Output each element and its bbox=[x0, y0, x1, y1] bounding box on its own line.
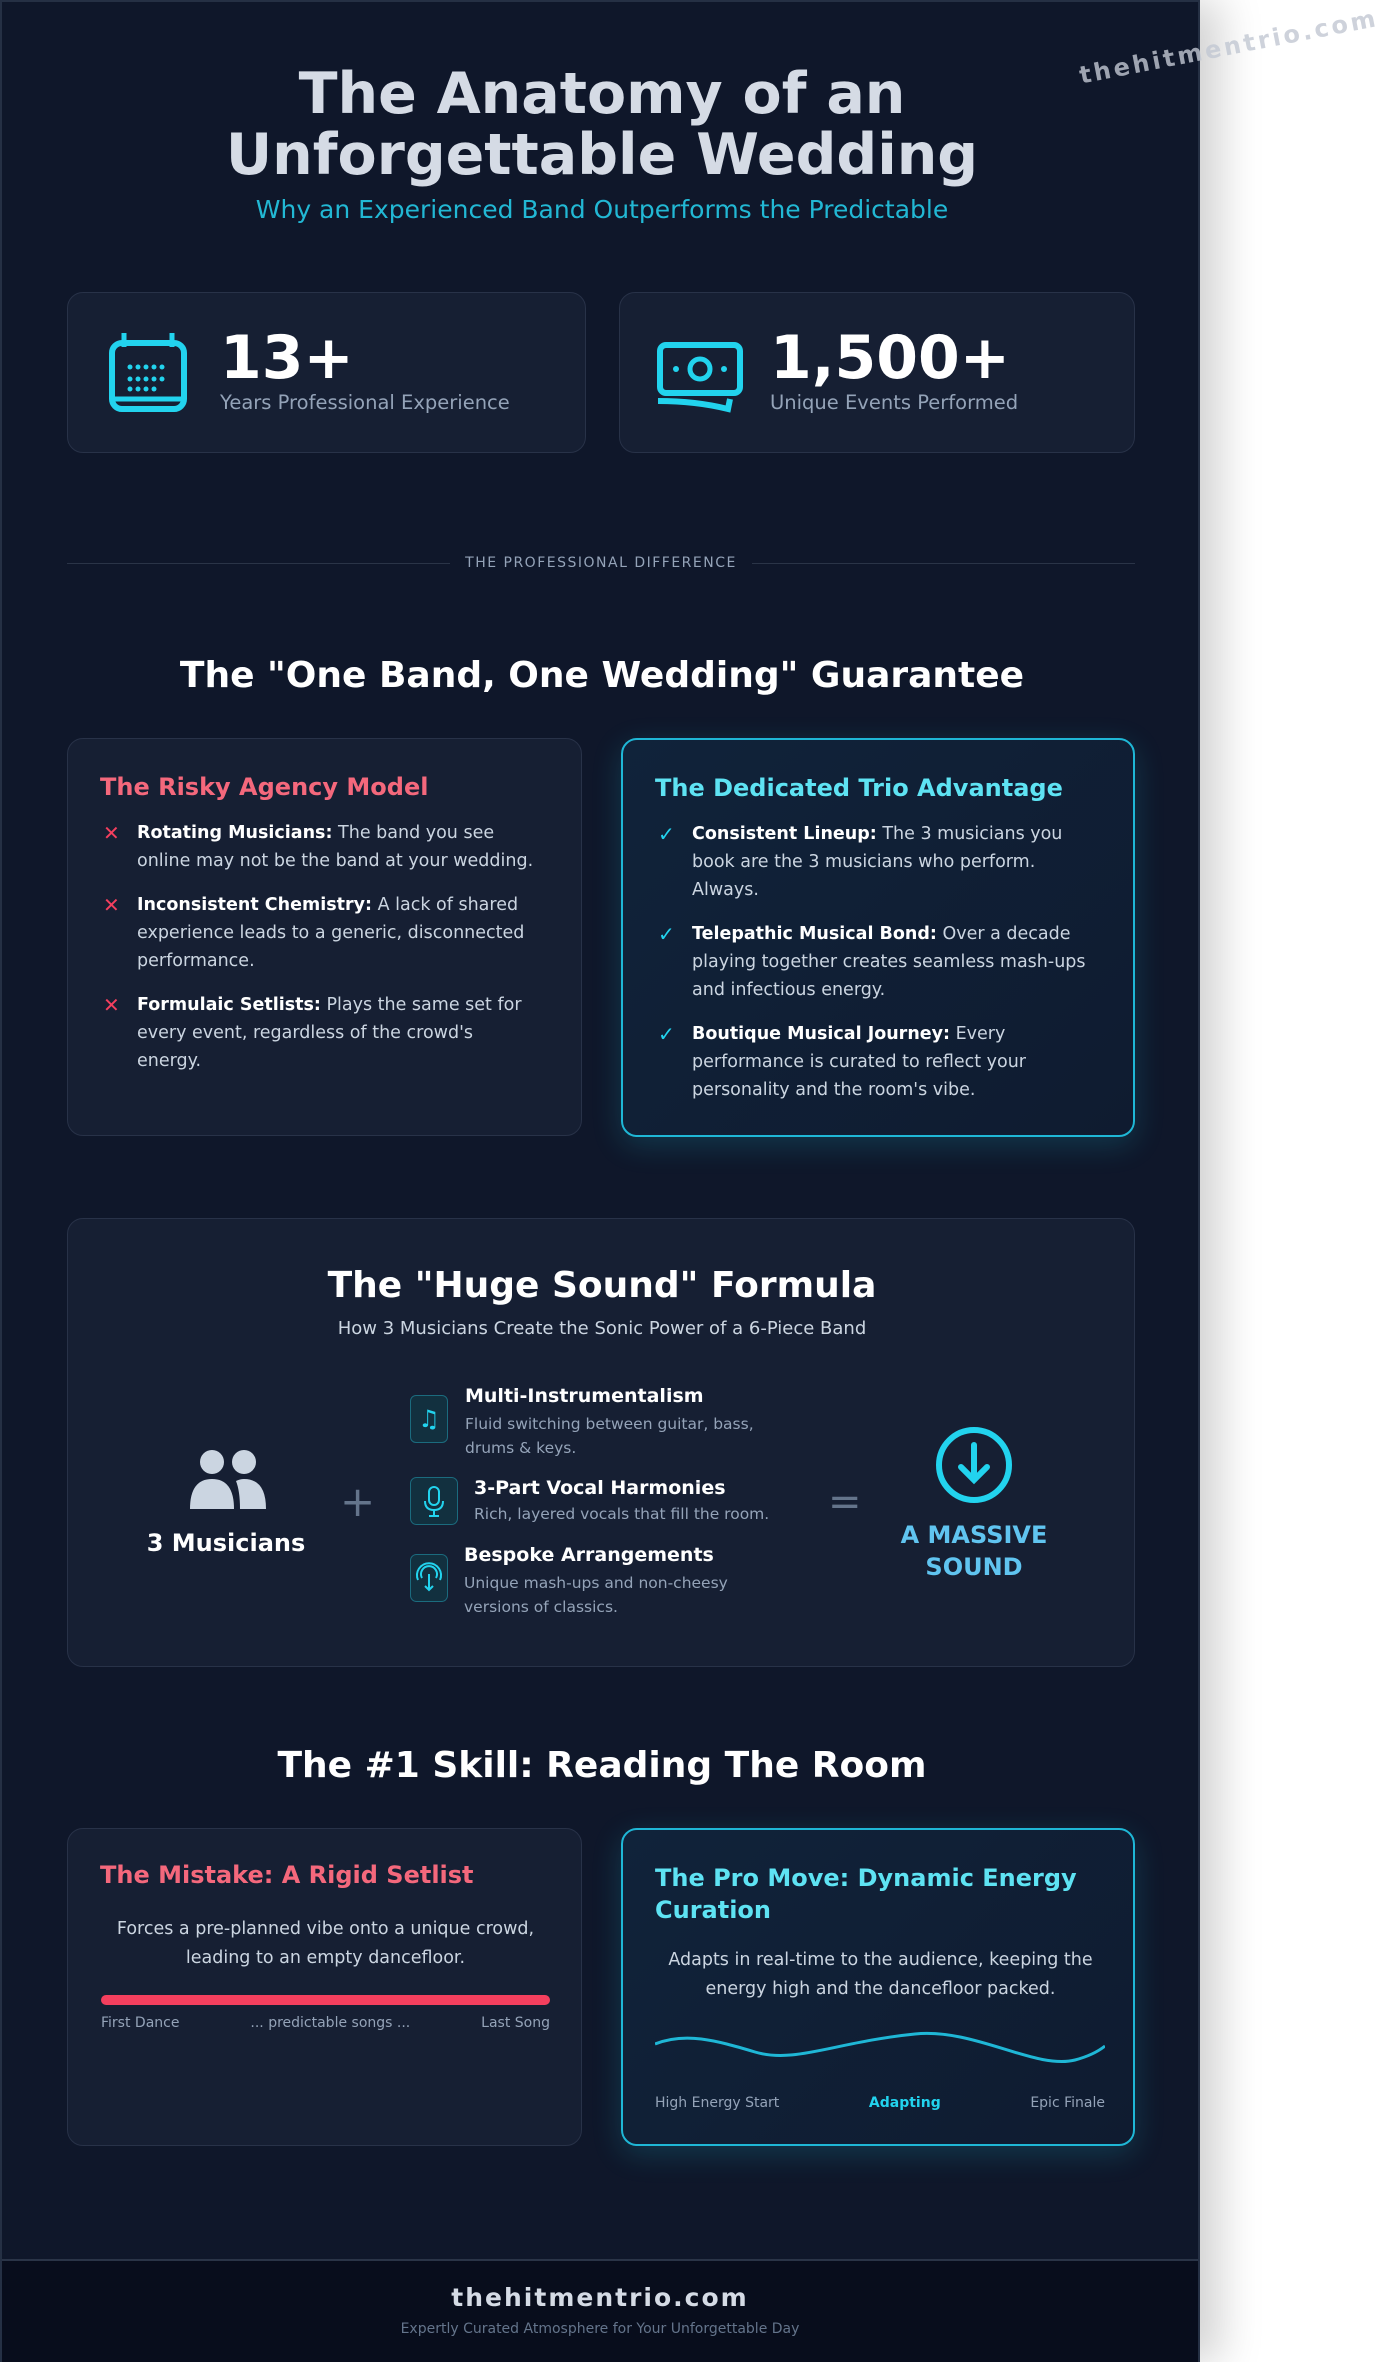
panel: pro move bbox=[621, 1828, 1135, 2146]
panel: dedicated trio: ✓ bbox=[658, 922, 675, 946]
bar labels: First Dance bbox=[101, 2015, 179, 2031]
icon: music bbox=[410, 1395, 448, 1443]
stat label: Years Professional Experience bbox=[220, 391, 510, 414]
panel: risky agency bbox=[67, 738, 582, 1136]
panel: dedicated trio: ✓ bbox=[658, 822, 675, 846]
icon: mic bbox=[410, 1477, 458, 1525]
feature: vocal harmonies bbox=[410, 1477, 769, 1525]
icon: music: ♫ bbox=[418, 1405, 440, 1433]
result label: SOUND bbox=[925, 1553, 1023, 1581]
bar labels: ... predictable songs ... bbox=[250, 2015, 410, 2031]
feature: multi-instrumentalism: Multi-Instrumentalism bbox=[465, 1385, 704, 1407]
text: Adapts in real-time to the audience, keeping the energy high and the dancefloor packed. bbox=[668, 1950, 1093, 1999]
item: Formulaic Setlists: Plays the same set for every event, regardless of the crowd's energy. bbox=[137, 995, 522, 1071]
chart labels: High Energy Start bbox=[655, 2095, 779, 2111]
watermark: thehitmentrio.com bbox=[1077, 4, 1381, 89]
feature: bespoke arrangements: Unique mash-ups and non-cheesy versions of classics. bbox=[464, 1574, 728, 1616]
feature: multi-instrumentalism bbox=[410, 1385, 754, 1457]
feature: bespoke arrangements bbox=[410, 1544, 728, 1616]
stat number: 13+ bbox=[220, 323, 354, 393]
heading: The Risky Agency Model bbox=[100, 773, 428, 801]
title bbox=[226, 61, 978, 188]
panel: risky agency: ✕ bbox=[103, 821, 120, 845]
title: Unforgettable Wedding bbox=[226, 122, 978, 188]
icon: calendar bbox=[109, 333, 187, 412]
result label bbox=[900, 1521, 1047, 1581]
subtitle: Why an Experienced Band Outperforms the Predictable bbox=[256, 195, 948, 224]
result label: A MASSIVE bbox=[901, 1521, 1047, 1549]
divider label: THE PROFESSIONAL DIFFERENCE bbox=[465, 555, 737, 571]
item: Rotating Musicians: The band you see online may not be the band at your wedding. bbox=[137, 823, 533, 871]
panel: dedicated trio: ✓ bbox=[658, 1022, 675, 1046]
text: Forces a pre-planned vibe onto a unique crowd, leading to an empty dancefloor. bbox=[117, 1919, 534, 1968]
icon: people bbox=[190, 1450, 266, 1509]
stat number: 1,500+ bbox=[770, 323, 1010, 393]
panel: dedicated trio bbox=[621, 738, 1135, 1137]
heading: The "Huge Sound" Formula bbox=[328, 1265, 876, 1306]
icon: circle arrow bbox=[936, 1427, 1012, 1503]
chart labels bbox=[655, 2095, 1105, 2111]
heading: The Mistake: A Rigid Setlist bbox=[100, 1861, 474, 1889]
feature: multi-instrumentalism: Fluid switching between guitar, bass, drums & keys. bbox=[465, 1415, 754, 1457]
icon: touch bbox=[410, 1554, 448, 1602]
panel: risky agency: ✕ bbox=[103, 993, 120, 1017]
heading: reading the room: The #1 Skill: Reading The Room bbox=[277, 1745, 926, 1786]
heading: The Dedicated Trio Advantage bbox=[655, 774, 1063, 802]
panel: mistake bbox=[67, 1828, 582, 2146]
panel: huge sound formula bbox=[67, 1218, 1135, 1667]
bar labels: Last Song bbox=[481, 2015, 550, 2031]
item: Boutique Musical Journey: Every performance is curated to reflect your personality and the room's vibe. bbox=[692, 1024, 1026, 1100]
feature: vocal harmonies: 3-Part Vocal Harmonies bbox=[474, 1477, 726, 1499]
footer bbox=[2, 2259, 1198, 2362]
stat label: Unique Events Performed bbox=[770, 391, 1018, 414]
panel: risky agency: ✕ bbox=[103, 893, 120, 917]
chart labels: Adapting bbox=[869, 2095, 941, 2111]
feature: bespoke arrangements: Bespoke Arrangements bbox=[464, 1544, 714, 1566]
feature: vocal harmonies: Rich, layered vocals that fill the room. bbox=[474, 1505, 769, 1523]
icon: money bbox=[657, 342, 743, 413]
heading: guarantee: The "One Band, One Wedding" Guarantee bbox=[180, 655, 1024, 696]
item: Consistent Lineup: The 3 musicians you book are the 3 musicians who perform. Always. bbox=[692, 824, 1062, 900]
stat card: years bbox=[67, 292, 586, 453]
equals: = bbox=[828, 1479, 862, 1525]
footer tagline: Expertly Curated Atmosphere for Your Unforgettable Day bbox=[401, 2321, 799, 2337]
footer url: thehitmentrio.com bbox=[451, 2283, 749, 2312]
label: 3 musicians: 3 Musicians bbox=[147, 1529, 305, 1557]
subheading: How 3 Musicians Create the Sonic Power of a 6-Piece Band bbox=[338, 1318, 866, 1339]
bar labels bbox=[101, 2015, 550, 2031]
stat card: events bbox=[619, 292, 1135, 453]
plus: + bbox=[340, 1477, 375, 1526]
heading: The Pro Move: Dynamic Energy Curation bbox=[655, 1864, 1077, 1924]
item: Telepathic Musical Bond: Over a decade playing together creates seamless mash-ups and infectious energy. bbox=[692, 924, 1086, 1000]
chart: wave bbox=[655, 2032, 1105, 2063]
chart labels: Epic Finale bbox=[1030, 2095, 1105, 2111]
item: Inconsistent Chemistry: A lack of shared experience leads to a generic, disconnected performance. bbox=[137, 895, 524, 971]
title: The Anatomy of an bbox=[299, 61, 905, 127]
bar bbox=[101, 1995, 550, 2005]
